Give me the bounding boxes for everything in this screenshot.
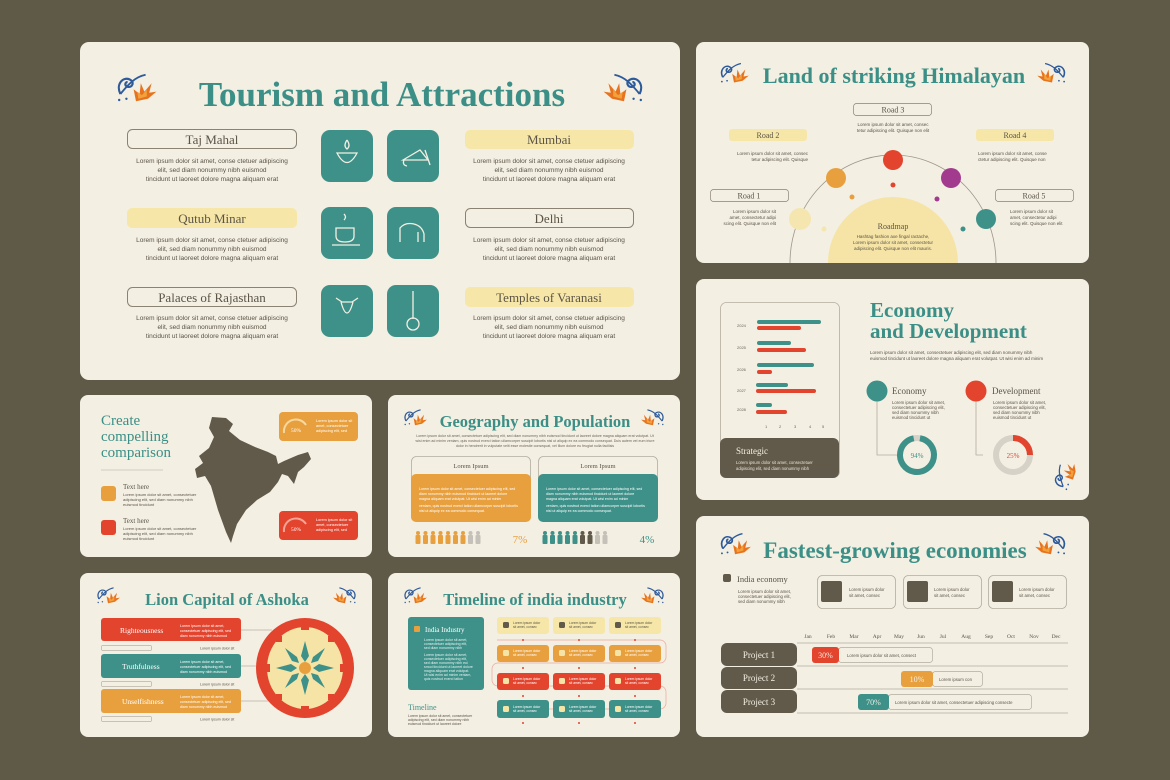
road labels: Lorem ipsum dolor sit bbox=[733, 209, 777, 214]
panel: geography and population: Lorem ipsum dolor sit amet, consectetuer adipiscing elit, sed diam nonummy nibh euismod tincidunt ut laoreet dolore magna aliquam erat volutpat. Ut bbox=[416, 434, 654, 438]
people icons bbox=[416, 531, 654, 546]
metric: development: sed diam nonummy nibh bbox=[993, 410, 1040, 415]
icon: ornaments bbox=[721, 534, 1065, 554]
card: left: Lorem Ipsum bbox=[453, 463, 489, 470]
text block: euismod tincidunt ut laoreet dolore magna aliquam erat volutpat. Ut wisi enim ad minim bbox=[870, 356, 1043, 361]
stat card: orange: adipiscing elit, sed bbox=[316, 429, 347, 433]
item: Taj Mahal: elit, sed diam nonummy nibh euismod bbox=[157, 167, 267, 174]
panel: land of striking himalayan bbox=[696, 42, 1089, 263]
card: india industry: sed diam nonummy nibh bbox=[424, 646, 462, 650]
roadmap arc: adipiscing elit. Quisque non elit mauris. bbox=[854, 246, 932, 251]
icon: ornaments bbox=[98, 588, 356, 603]
item: Qutub Minar: tincidunt ut laoreet dolore magna aliquam erat bbox=[146, 255, 278, 262]
bar chart: Strategic bbox=[736, 446, 768, 456]
comparison items: adipiscing elit, sed diam nonummy nibh bbox=[123, 531, 193, 536]
road labels: amet, consectetur adipi bbox=[729, 215, 776, 220]
item: Temples of Varanasi: tincidunt ut laoreet dolore magna aliquam erat bbox=[483, 333, 615, 340]
card: right: diam nonummy nibh euismod tincidunt ut laoreet dolore bbox=[546, 492, 634, 496]
title: Geography and Population bbox=[440, 412, 630, 431]
gantt chart: Dec bbox=[1052, 634, 1061, 640]
title: Create bbox=[101, 413, 140, 429]
panel: economy and development bbox=[696, 279, 1089, 500]
card: right: nisl ut aliquip ex ea commodo consequat. bbox=[546, 509, 612, 513]
item: Temples of Varanasi: Lorem ipsum dolor sit amet, conse ctetuer adipiscing bbox=[473, 315, 625, 322]
gantt chart: Project 3 bbox=[743, 697, 776, 707]
card: right: Lorem ipsum dolor sit amet, consectetuer adipiscing elit, sed bbox=[546, 487, 642, 491]
road labels: Road 4 bbox=[1004, 131, 1026, 140]
people icons: 4% bbox=[640, 534, 654, 546]
timeline grid: sit amet, consec bbox=[625, 653, 649, 657]
road labels: Road 1 bbox=[738, 192, 760, 200]
gantt chart: Lorem ipsum con bbox=[939, 677, 973, 682]
gantt chart: Project 1 bbox=[743, 650, 775, 660]
gantt chart: Feb bbox=[827, 634, 835, 640]
gantt chart: Aug bbox=[961, 634, 971, 640]
bar: righteousness: diam nonummy nibh euismod bbox=[180, 634, 227, 638]
item: Mumbai: Mumbai bbox=[527, 132, 571, 147]
gantt chart: Mar bbox=[849, 634, 859, 640]
road labels: Road 3 bbox=[882, 106, 904, 114]
gantt chart: May bbox=[894, 634, 904, 640]
card: left: veniam, quis nostrud exerci tation ullamcorper suscipit lobortis bbox=[419, 504, 518, 508]
bar: unselfishness: Unselfishness bbox=[122, 697, 164, 706]
icon: ashoka chakra wheel bbox=[256, 618, 354, 718]
comparison items: Lorem ipsum dolor sit amet, consectetuer bbox=[123, 526, 197, 531]
icon: ornaments bbox=[404, 410, 664, 425]
item: Qutub Minar bbox=[127, 208, 297, 262]
text block: timeline bbox=[408, 703, 473, 726]
item: Palaces of Rajasthan: elit, sed diam nonummy nibh euismod bbox=[157, 324, 267, 331]
feature cards: sit amet, consec bbox=[1019, 593, 1051, 598]
icon: ornaments bbox=[721, 63, 1065, 83]
people icons: 7% bbox=[513, 534, 527, 546]
gantt chart: Apr bbox=[873, 634, 881, 640]
card: india industry: consectetuer adipiscing elit, bbox=[424, 642, 467, 646]
road labels: Lorem ipsum dolor sit bbox=[1010, 209, 1054, 214]
road labels: tetur adipiscing elit. Quisque bbox=[751, 157, 808, 162]
item: Delhi: Delhi bbox=[535, 211, 564, 226]
timeline grid bbox=[492, 617, 666, 724]
metric: development: consectetuer adipiscing elit, bbox=[993, 405, 1046, 410]
comparison items: adipiscing elit, sed diam nonummy nibh bbox=[123, 497, 193, 502]
timeline grid: sit amet, consec bbox=[513, 709, 537, 713]
india economy legend: Lorem ipsum dolor sit amet, bbox=[738, 589, 791, 594]
icon: ornament bbox=[1051, 458, 1080, 490]
card: india industry bbox=[408, 617, 484, 690]
gantt chart: Nov bbox=[1029, 634, 1039, 640]
item: Taj Mahal: tincidunt ut laoreet dolore magna aliquam erat bbox=[146, 176, 278, 183]
timeline grid: Lorem ipsum dolor bbox=[625, 705, 653, 709]
item: Qutub Minar: Lorem ipsum dolor sit amet, conse ctetuer adipiscing bbox=[136, 237, 288, 244]
item: Temples of Varanasi bbox=[465, 287, 634, 340]
card: right: magna aliquam erat volutpat. Ut wisi enim ad minim bbox=[546, 497, 628, 501]
item: Delhi: tincidunt ut laoreet dolore magna aliquam erat bbox=[483, 255, 615, 262]
roadmap arc bbox=[789, 150, 996, 263]
panel: geography and population: dolor in hendrerit in vulputate velit esse molestie consequat, vel illum dolore eu feugiat nulla facilisis bbox=[456, 444, 614, 448]
feature cards: Lorem ipsum dolor bbox=[1019, 587, 1055, 592]
card: india industry: smod tincidunt ut laoreet dolore bbox=[424, 665, 473, 669]
item: Palaces of Rajasthan: Lorem ipsum dolor sit amet, conse ctetuer adipiscing bbox=[136, 315, 288, 322]
timeline grid: Lorem ipsum dolor bbox=[569, 677, 597, 681]
timeline grid: sit amet, consec bbox=[569, 709, 593, 713]
panel: geography and population: wisi enim ad minim veniam, quis nostrud exerci tation ullamcorper suscipit lobortis nisl ut aliquip ex ea commodo consequat. Duis autem vel eum iriure bbox=[416, 439, 654, 443]
bar: truthfulness bbox=[101, 654, 241, 686]
gantt chart: Jan bbox=[804, 634, 812, 640]
text block: Lorem ipsum dolor sit amet, consectetuer adipiscing elit, sed diam nonummy nibh bbox=[870, 350, 1033, 355]
item: Delhi: Lorem ipsum dolor sit amet, conse ctetuer adipiscing bbox=[473, 237, 625, 244]
timeline grid: Lorem ipsum dolor bbox=[513, 649, 541, 653]
text block: timeline: Timeline bbox=[408, 703, 437, 712]
item: Mumbai: Lorem ipsum dolor sit amet, conse ctetuer adipiscing bbox=[473, 158, 625, 165]
timeline grid: sit amet, consec bbox=[625, 681, 649, 685]
bar: truthfulness: Lorem ipsum dolor sit amet, bbox=[180, 660, 224, 664]
feature cards: Lorem ipsum dolor bbox=[934, 587, 970, 592]
metric: development: Lorem ipsum dolor sit amet, bbox=[993, 400, 1046, 405]
road labels: amet, consectetur adipi bbox=[1010, 215, 1057, 220]
stat card: orange bbox=[279, 412, 358, 441]
gantt chart: Jun bbox=[917, 634, 925, 640]
metric: development: Development bbox=[992, 386, 1041, 396]
timeline grid: sit amet, consec bbox=[513, 625, 537, 629]
feature cards: Lorem ipsum dolor bbox=[849, 587, 885, 592]
panel: fastest-growing economies bbox=[696, 516, 1089, 737]
bar chart: 1 bbox=[765, 424, 768, 429]
feature cards: sit amet, consec bbox=[934, 593, 966, 598]
road labels: tetur adipiscing elit. Quisque non elit bbox=[857, 128, 930, 133]
road labels: ctetur adipiscing elit. Quisque non bbox=[978, 157, 1046, 162]
bar: truthfulness: Truthfulness bbox=[122, 662, 160, 671]
card: left bbox=[411, 456, 531, 522]
bar chart: 4 bbox=[809, 424, 812, 429]
bar: righteousness: consectetuer adipiscing elit, sed bbox=[180, 629, 231, 633]
bar chart: 2028 bbox=[737, 407, 747, 412]
card: left: magna aliquam erat volutpat. Ut wisi enim ad minim bbox=[419, 497, 501, 501]
road labels: scing elit. Quisque non elit bbox=[723, 221, 777, 226]
card: right: Lorem Ipsum bbox=[580, 463, 616, 470]
item: Delhi: elit, sed diam nonummy nibh euismod bbox=[494, 246, 604, 253]
metric: economy: 94% bbox=[911, 452, 924, 460]
stat card: red: amet, consectetuer bbox=[316, 523, 349, 527]
card: india industry: magna aliquam erat volutpat. bbox=[424, 669, 469, 673]
metric: economy: consectetuer adipiscing elit, bbox=[892, 405, 945, 410]
item: Taj Mahal: Taj Mahal bbox=[186, 132, 239, 147]
item: Palaces of Rajasthan bbox=[128, 288, 296, 340]
gantt chart: Project 2 bbox=[743, 673, 775, 683]
timeline grid: Lorem ipsum dolor bbox=[513, 621, 541, 625]
title: Tourism and Attractions bbox=[199, 75, 565, 114]
road labels: Lorem ipsum dolor sit amet, consec bbox=[857, 122, 929, 127]
timeline grid: Lorem ipsum dolor bbox=[625, 649, 653, 653]
stat card: red: Lorem ipsum dolor sit bbox=[316, 518, 353, 522]
road labels: Lorem ipsum dolor sit amet, conse bbox=[978, 151, 1047, 156]
road labels: Lorem ipsum dolor sit amet, consec bbox=[737, 151, 809, 156]
bar: unselfishness: consectetuer adipiscing elit, sed bbox=[180, 700, 231, 704]
timeline grid: Lorem ipsum dolor bbox=[513, 677, 541, 681]
gantt chart: Lorem ipsum dolor sit amet, consectetuer adipiscing consecte bbox=[895, 700, 1013, 705]
bar chart: 2026 bbox=[737, 367, 747, 372]
timeline grid: sit amet, consec bbox=[569, 653, 593, 657]
card: india industry: Lorem ipsum dolor sit amet, bbox=[424, 638, 467, 642]
bar chart: Lorem ipsum dolor sit amet, consectetuer bbox=[736, 460, 813, 465]
item: Temples of Varanasi: elit, sed diam nonummy nibh euismod bbox=[494, 324, 604, 331]
timeline grid: sit amet, consec bbox=[513, 653, 537, 657]
metric: development: euismod tincidunt ut bbox=[993, 415, 1032, 420]
text block: timeline: Lorem ipsum dolor sit amet, consectetuer bbox=[408, 714, 473, 718]
stat card: red: adipiscing elit, sed bbox=[316, 528, 347, 532]
timeline grid: Lorem ipsum dolor bbox=[569, 621, 597, 625]
road labels: scing elit. Quisque non elit bbox=[1010, 221, 1063, 226]
bar: truthfulness: diam nonummy nibh euismod bbox=[180, 670, 227, 674]
stat card: red: 50% bbox=[291, 527, 301, 533]
card: left: diam nonummy nibh euismod tincidunt ut laoreet dolore bbox=[419, 492, 507, 496]
road labels bbox=[710, 104, 1074, 226]
item: Taj Mahal: Lorem ipsum dolor sit amet, conse ctetuer adipiscing bbox=[136, 158, 288, 165]
card: right bbox=[538, 456, 658, 522]
icon: ornaments bbox=[404, 588, 664, 603]
feature cards bbox=[818, 576, 1066, 608]
timeline grid: Lorem ipsum dolor bbox=[569, 649, 597, 653]
item: Qutub Minar: Qutub Minar bbox=[178, 211, 246, 226]
roadmap arc: Lorem ipsum dolor sit amet, consectetur bbox=[853, 240, 934, 245]
title: comparison bbox=[101, 445, 171, 461]
stat card: orange: amet, consectetuer bbox=[316, 424, 349, 428]
india economy legend: sed diam nonummy nibh bbox=[738, 599, 785, 604]
panel: lion capital of ashoka bbox=[80, 573, 372, 737]
metric: development bbox=[966, 380, 1046, 472]
bar: righteousness bbox=[101, 618, 241, 650]
stat card: red bbox=[279, 511, 358, 540]
roadmap arc: Roadmap bbox=[878, 222, 908, 231]
item: Qutub Minar: elit, sed diam nonummy nibh euismod bbox=[157, 246, 267, 253]
item: Temples of Varanasi: Temples of Varanasi bbox=[496, 290, 602, 305]
bar chart: 2024 bbox=[737, 323, 747, 328]
item: Palaces of Rajasthan: tincidunt ut laoreet dolore magna aliquam erat bbox=[146, 333, 278, 340]
gantt chart: Sep bbox=[985, 634, 993, 640]
panel: create compelling comparison bbox=[80, 395, 372, 557]
card: left: nisl ut aliquip ex ea commodo consequat. bbox=[419, 509, 485, 513]
bar chart: 3 bbox=[794, 424, 797, 429]
timeline grid: Lorem ipsum dolor bbox=[625, 621, 653, 625]
timeline grid: sit amet, consec bbox=[625, 625, 649, 629]
item: Taj Mahal bbox=[128, 130, 296, 183]
title: Timeline of india industry bbox=[443, 590, 628, 609]
gantt chart: 10% bbox=[910, 675, 925, 684]
bar chart bbox=[720, 302, 840, 478]
bar chart: 5 bbox=[822, 424, 825, 429]
bar: truthfulness: consectetuer adipiscing elit, sed bbox=[180, 665, 231, 669]
bar: unselfishness: diam nonummy nibh euismod bbox=[180, 705, 227, 709]
india economy legend: India economy bbox=[737, 574, 788, 584]
connectors bbox=[241, 630, 272, 701]
panel: timeline of india industry bbox=[388, 573, 680, 737]
roadmap arc: Hashtag fashion axe fingal ractache, bbox=[857, 234, 929, 239]
bar: righteousness: Lorem ipsum dolor sit amet, bbox=[180, 624, 224, 628]
bar: unselfishness: Lorem ipsum dolor sit bbox=[200, 718, 234, 722]
metric: economy: sed diam nonummy nibh bbox=[892, 410, 939, 415]
timeline grid: sit amet, consec bbox=[513, 681, 537, 685]
metric: economy: Economy bbox=[892, 386, 927, 396]
india economy legend: consectetuer adipiscing elit, bbox=[738, 594, 791, 599]
bar: unselfishness bbox=[101, 689, 241, 722]
bar: righteousness: Righteousness bbox=[120, 626, 163, 635]
bar: truthfulness: Lorem ipsum dolor sit bbox=[200, 682, 234, 686]
bar chart: 2 bbox=[779, 424, 782, 429]
item: Mumbai: elit, sed diam nonummy nibh euismod bbox=[494, 167, 604, 174]
timeline grid: Lorem ipsum dolor bbox=[625, 677, 653, 681]
gantt chart: Lorem ipsum dolor sit amet, consect bbox=[847, 653, 917, 658]
card: india industry: Ut wisi enim ad minim veniam, bbox=[424, 673, 471, 677]
title: Land of striking Himalayan bbox=[763, 63, 1025, 88]
bar chart: 2025 bbox=[737, 345, 747, 350]
stat card: orange: 50% bbox=[291, 428, 301, 434]
card: india industry: sed diam nonummy nibh eui bbox=[424, 661, 468, 665]
metric: economy bbox=[866, 380, 945, 475]
item: Palaces of Rajasthan: Palaces of Rajasthan bbox=[158, 290, 266, 305]
timeline grid: sit amet, consec bbox=[625, 709, 649, 713]
bar chart: adipiscing elit, sed diam nonummy nibh bbox=[736, 466, 810, 471]
bar chart: 2027 bbox=[737, 388, 747, 393]
text block: timeline: euismod tincidunt ut laoreet dolore bbox=[408, 722, 462, 726]
road labels: Road 5 bbox=[1023, 192, 1045, 200]
road labels: Road 2 bbox=[757, 131, 779, 140]
map: india bbox=[195, 417, 311, 543]
comparison items: euismod tincidunt bbox=[123, 502, 155, 507]
item: Delhi bbox=[466, 208, 634, 262]
gantt chart: Oct bbox=[1007, 634, 1015, 640]
feature cards: sit amet, consec bbox=[849, 593, 881, 598]
panel: tourism and attractions bbox=[80, 42, 680, 380]
icon grid bbox=[321, 130, 439, 337]
text block: timeline: adipiscing elit, sed diam nonummy nibh bbox=[408, 718, 469, 722]
card: india industry: quis nostrud exerci tation bbox=[424, 677, 463, 681]
comparison items: Text here bbox=[123, 517, 149, 525]
stat card: orange: Lorem ipsum dolor sit bbox=[316, 419, 353, 423]
timeline grid: Lorem ipsum dolor bbox=[569, 705, 597, 709]
icon: ornament left bbox=[118, 75, 156, 101]
card: left: Lorem ipsum dolor sit amet, consectetuer adipiscing elit, sed bbox=[419, 487, 515, 491]
metric: economy: Lorem ipsum dolor sit amet, bbox=[892, 400, 945, 405]
comparison items: euismod tincidunt bbox=[123, 536, 155, 541]
gantt chart: 70% bbox=[866, 698, 881, 707]
comparison items bbox=[101, 483, 197, 541]
bar: righteousness: Lorem ipsum dolor sit bbox=[200, 646, 234, 650]
icon: ornament right bbox=[604, 75, 642, 101]
bar: unselfishness: Lorem ipsum dolor sit amet, bbox=[180, 695, 224, 699]
title: Lion Capital of Ashoka bbox=[145, 590, 309, 609]
comparison items: Text here bbox=[123, 483, 149, 491]
metric: development: 25% bbox=[1007, 452, 1020, 460]
gantt chart: Jul bbox=[940, 634, 947, 640]
metric: economy: euismod tincidunt ut bbox=[892, 415, 931, 420]
panel: geography and population bbox=[388, 395, 680, 557]
timeline grid: sit amet, consec bbox=[569, 681, 593, 685]
title: Economy bbox=[870, 298, 954, 322]
gantt chart bbox=[721, 634, 1068, 713]
timeline grid: Lorem ipsum dolor bbox=[513, 705, 541, 709]
card: india industry: Lorem ipsum dolor sit amet, bbox=[424, 653, 467, 657]
card: india industry: India Industry bbox=[425, 626, 465, 634]
item: Mumbai: tincidunt ut laoreet dolore magna aliquam erat bbox=[483, 176, 615, 183]
india economy legend bbox=[723, 574, 791, 604]
item: Mumbai bbox=[465, 130, 634, 183]
title: and Development bbox=[870, 319, 1027, 343]
card: right: veniam, quis nostrud exerci tation ullamcorper suscipit lobortis bbox=[546, 504, 645, 508]
gantt chart: 30% bbox=[818, 651, 833, 660]
comparison items: Lorem ipsum dolor sit amet, consectetuer bbox=[123, 492, 197, 497]
title: compelling bbox=[101, 429, 169, 445]
title: Fastest-growing economies bbox=[763, 538, 1027, 563]
timeline grid: sit amet, consec bbox=[569, 625, 593, 629]
card: india industry: consectetuer adipiscing elit, bbox=[424, 657, 467, 661]
